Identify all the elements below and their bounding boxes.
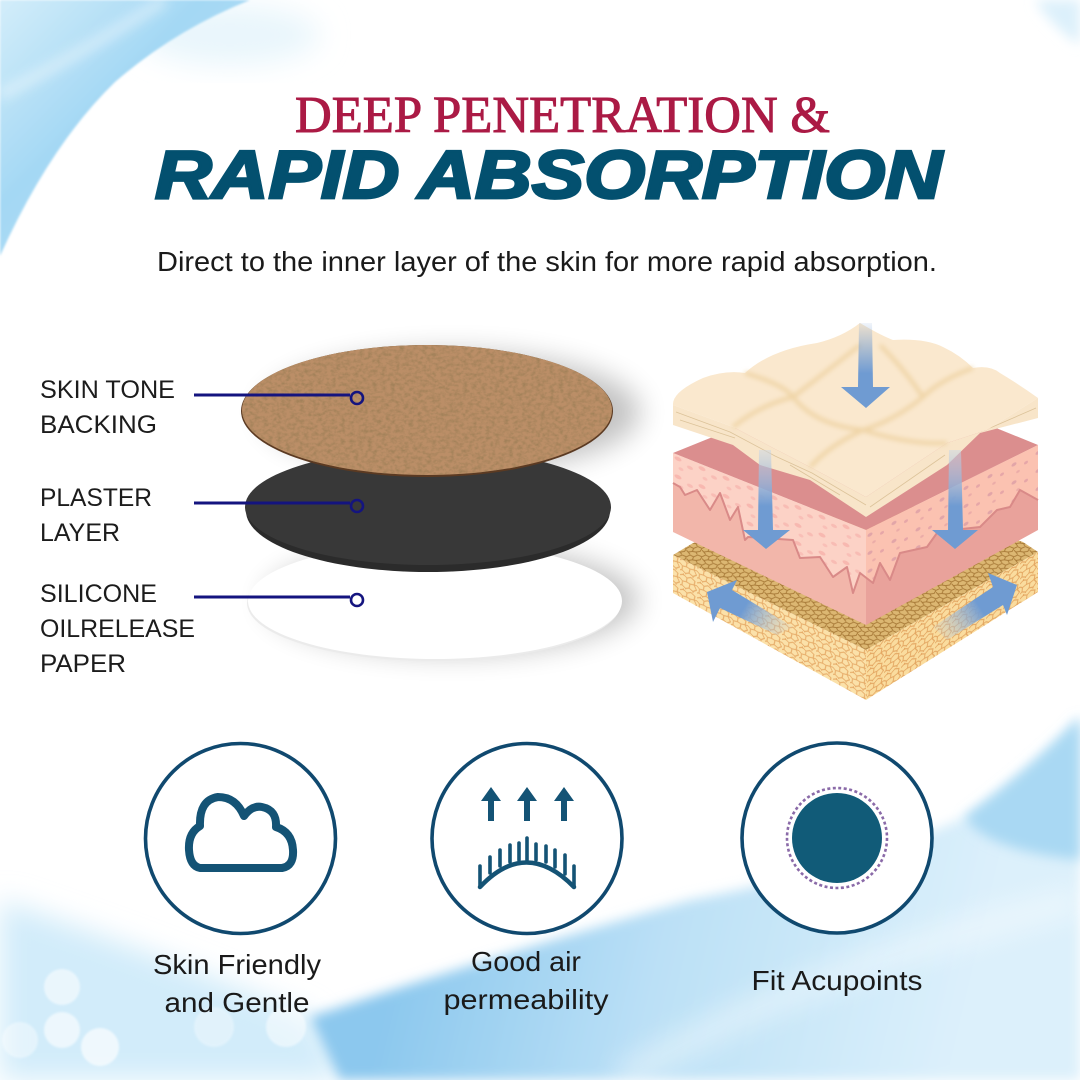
skin cross-section diagram <box>673 323 1038 700</box>
badge with dot icon <box>742 743 932 933</box>
blue arrow: lower left <box>707 580 793 635</box>
blue arrow: left <box>743 450 790 549</box>
white release paper layer <box>247 543 622 661</box>
caption: Good air <box>471 946 581 977</box>
badge with cloud icon <box>146 744 336 934</box>
label: silicone paper <box>40 580 195 678</box>
feature: fit acupoints <box>742 743 932 996</box>
epidermis layer <box>673 323 1038 517</box>
label: plaster layer <box>40 484 152 547</box>
leader: plaster layer <box>194 500 363 512</box>
fat layer <box>673 490 1038 700</box>
badge with arrows and comb icon <box>432 744 622 934</box>
label: silicone paper: OILRELEASE <box>40 615 195 643</box>
label: silicone paper: PAPER <box>40 650 126 678</box>
feature: skin friendly <box>146 744 336 1018</box>
blue arrow: right <box>932 450 978 549</box>
disk shadows <box>264 352 640 654</box>
caption <box>153 949 321 1018</box>
feature: air permeability <box>432 744 622 1015</box>
brown backing layer <box>241 345 613 477</box>
caption: permeability <box>444 984 608 1015</box>
title <box>155 87 944 213</box>
label: skin tone backing: BACKING <box>40 411 157 439</box>
caption <box>444 946 608 1015</box>
panel: patch layers <box>241 345 640 661</box>
leader: skin tone backing <box>194 392 363 404</box>
dermis layer <box>673 375 1038 625</box>
label: plaster layer: PLASTER <box>40 484 152 512</box>
caption: Fit Acupoints <box>752 965 922 996</box>
black plaster layer <box>245 449 611 572</box>
title line 1: deep penetration: DEEP PENETRATION & <box>295 87 830 144</box>
labels and leader lines <box>40 376 363 678</box>
label: skin tone backing <box>40 376 175 439</box>
label: skin tone backing: SKIN TONE <box>40 376 175 404</box>
label: plaster layer: LAYER <box>40 519 120 547</box>
caption: and Gentle <box>164 987 310 1018</box>
blue arrow: lower right <box>933 573 1017 640</box>
leader: silicone paper <box>194 594 363 606</box>
subtitle: Direct to the inner layer of the skin for more rapid absorption. <box>157 246 937 277</box>
blue arrow: center <box>841 323 890 408</box>
caption: Skin Friendly <box>153 949 321 980</box>
label: silicone paper: SILICONE <box>40 580 157 608</box>
title line 2: rapid absorption: RAPID ABSORPTION <box>155 137 944 213</box>
